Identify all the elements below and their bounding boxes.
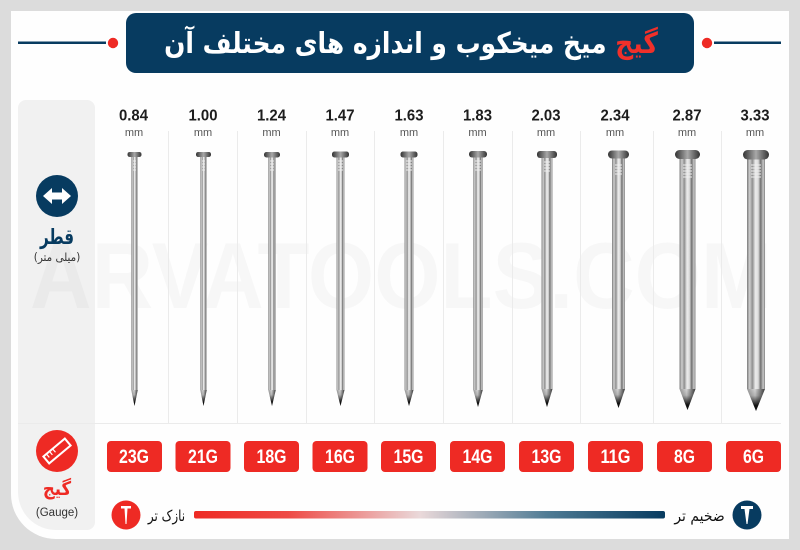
- label: thicker: ضخیم تر: [673, 509, 725, 525]
- gauge badge: 11G: [600, 446, 630, 468]
- diameter value: 2.87: [672, 108, 702, 124]
- nail: [332, 152, 349, 406]
- gauge badge: 18G: [256, 446, 286, 468]
- nail: [128, 152, 142, 406]
- column 16G: [312, 108, 368, 472]
- gauge badge: [519, 441, 574, 472]
- gauge badge: [381, 441, 436, 472]
- gauge badge: [588, 441, 643, 472]
- column 11G: [588, 108, 643, 472]
- column 23G: [107, 108, 162, 472]
- column 13G: [519, 108, 574, 472]
- gradient bar: [194, 511, 665, 518]
- column 21G: [176, 108, 230, 472]
- column 15G: [381, 108, 436, 472]
- right decoration: line and dot: [702, 38, 781, 48]
- label: thinner: نازک تر: [147, 508, 185, 525]
- diameter value: 1.63: [394, 108, 424, 124]
- gauge badge: [107, 441, 162, 472]
- nail: [537, 151, 557, 407]
- diameter value: 1.00: [188, 108, 218, 124]
- gauge label: گیج: [43, 477, 72, 500]
- unit: mm: [125, 127, 143, 139]
- unit: mm: [537, 127, 555, 139]
- gauge badge: 8G: [674, 446, 695, 468]
- unit: mm: [400, 127, 418, 139]
- scale bar: [112, 500, 762, 530]
- gauge badge: 23G: [119, 446, 149, 468]
- gauge badge: 16G: [325, 446, 355, 468]
- icon: gauge: [36, 430, 78, 472]
- column 18G: [244, 108, 299, 472]
- nail: [196, 152, 211, 406]
- column 6G: [726, 108, 781, 472]
- nail: [469, 151, 487, 407]
- unit: mm: [606, 127, 624, 139]
- column 14G: [450, 108, 505, 472]
- gauge badge: [244, 441, 299, 472]
- nail: [743, 150, 769, 411]
- diameter value: 0.84: [119, 108, 148, 124]
- gauge badge: 14G: [462, 446, 492, 468]
- diameter label: قطر: [39, 226, 74, 250]
- icon: thin nail: [112, 500, 140, 530]
- gauge badge: [312, 441, 368, 472]
- unit: mm: [262, 127, 281, 139]
- diameter value: 3.33: [740, 108, 770, 124]
- diameter value: 2.03: [532, 108, 561, 124]
- nail: [400, 152, 418, 406]
- gauge unit: (Gauge): [36, 507, 78, 519]
- column 8G: [657, 108, 712, 472]
- gauge badge: [726, 441, 781, 472]
- title: گیج میخ میخکوب و اندازه های مختلف آن: [164, 25, 658, 61]
- unit: mm: [746, 127, 764, 139]
- gauge badge: 13G: [532, 446, 562, 468]
- unit: mm: [194, 127, 212, 139]
- gauge badge: [450, 441, 505, 472]
- left decoration: line and dot: [18, 38, 118, 48]
- panel: row labels: [18, 100, 95, 530]
- gauge badge: [176, 441, 230, 472]
- gauge badge: 6G: [743, 446, 764, 468]
- gauge badge: 21G: [188, 446, 218, 468]
- diameter value: 1.83: [463, 108, 492, 124]
- column grid: [18, 131, 781, 424]
- diameter value: 2.34: [600, 108, 630, 124]
- diameter value: 1.47: [326, 108, 355, 124]
- gauge badge: [657, 441, 712, 472]
- nail: [264, 152, 280, 406]
- gauge badge: 15G: [394, 446, 424, 468]
- diameter value: 1.24: [257, 108, 286, 124]
- unit: mm: [331, 127, 349, 139]
- nail: [608, 150, 629, 408]
- icon: diameter: [36, 175, 78, 217]
- unit: mm: [468, 127, 487, 139]
- nail: [675, 150, 700, 410]
- title: [126, 13, 694, 73]
- diameter unit: (میلی متر): [34, 250, 80, 264]
- unit: mm: [678, 127, 696, 139]
- icon: thick nail: [732, 500, 762, 530]
